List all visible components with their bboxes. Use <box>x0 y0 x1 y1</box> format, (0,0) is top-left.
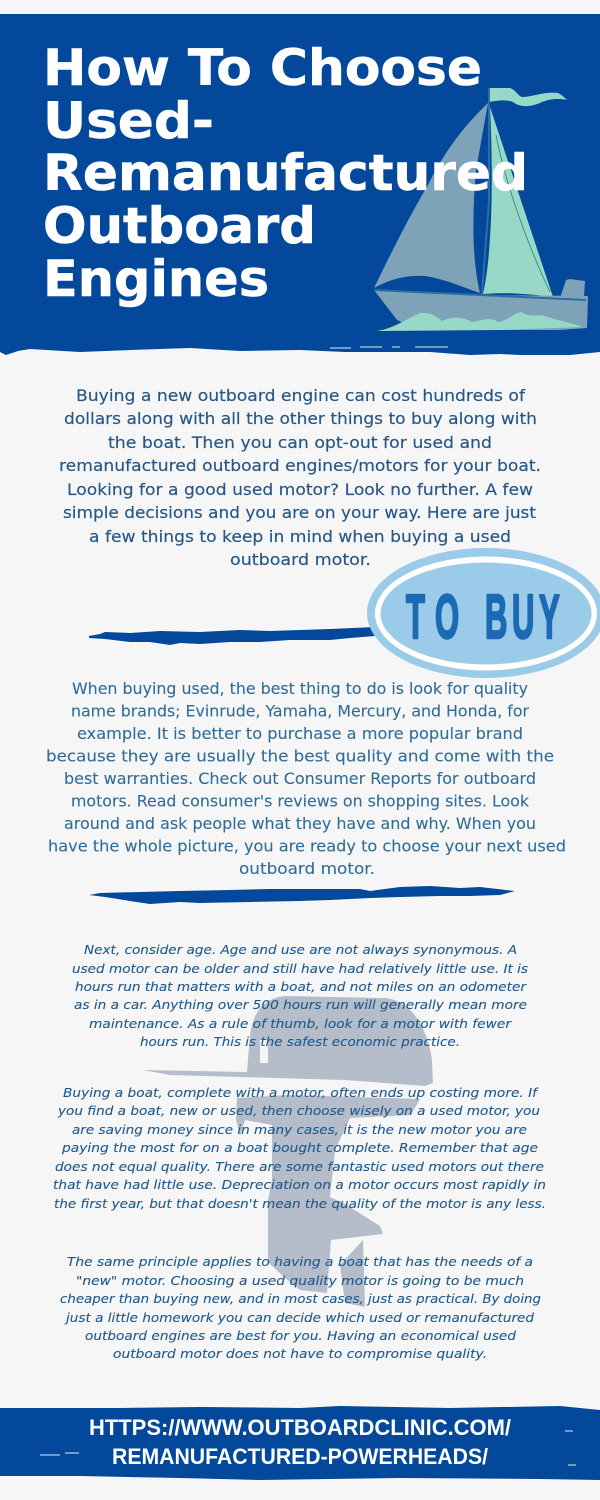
badge: to buy: Y <box>539 584 560 652</box>
paragraph: boat with motor: you find a boat, new or used, then choose wisely on a used motor, you <box>57 1104 540 1119</box>
paragraph: buying used brands <box>46 679 566 878</box>
intro paragraph: Buying a new outboard engine can cost hundreds of <box>76 386 526 405</box>
panel: header band <box>0 14 600 355</box>
footer url: HTTPS://WWW.OUTBOARDCLINIC.COM/ <box>89 1415 511 1440</box>
intro paragraph: the boat. Then you can opt-out for used and <box>108 433 492 452</box>
paragraph: buying used brands: example. It is better to purchase a more popular brand <box>77 724 523 743</box>
paragraph: boat with motor <box>53 1086 546 1212</box>
intro paragraph: simple decisions and you are on your way. Here are just <box>63 503 536 522</box>
intro paragraph: remanufactured outboard engines/motors for your boat. <box>59 456 541 475</box>
intro paragraph: Looking for a good used motor? Look no further. A few <box>67 480 533 499</box>
paragraph: same principle: outboard engines are best for you. Having an economical used <box>85 1329 517 1344</box>
paragraph: buying used brands: name brands; Evinrude, Yamaha, Mercury, and Honda, for <box>71 702 529 720</box>
badge: to buy: B <box>485 584 507 652</box>
paragraph: same principle <box>60 1255 541 1362</box>
left sail <box>374 103 488 293</box>
watermark: outboard motor silhouette <box>143 996 433 1307</box>
paragraph: same principle: The same principle applies to having a boat that has the needs of a <box>67 1255 533 1270</box>
badge: to buy: O <box>435 584 459 652</box>
paragraph: buying used brands: When buying used, the best thing to do is look for quality <box>72 679 528 698</box>
title: Remanufactured <box>43 144 528 202</box>
paragraph: boat with motor: are saving money since in many cases, it is the new motor you are <box>72 1123 527 1138</box>
boat flag <box>489 88 567 106</box>
paragraph: consider age <box>72 943 528 1050</box>
badge: to buy: T <box>406 584 425 652</box>
waves <box>377 312 582 331</box>
title <box>43 39 528 308</box>
title: Used- <box>43 92 214 150</box>
paragraph: consider age: Next, consider age. Age and use are not always synonymous. A <box>84 943 517 958</box>
intro paragraph: dollars along with all the other things to buy along with <box>64 409 537 428</box>
paragraph: consider age: maintenance. As a rule of thumb, look for a motor with fewer <box>89 1017 512 1032</box>
paragraph: boat with motor: paying the most for on a boat bought complete. Remember that age <box>61 1141 538 1156</box>
icon: sailboat <box>374 88 588 331</box>
paragraph: same principle: "new" motor. Choosing a used quality motor is going to be much <box>76 1274 524 1289</box>
paragraph: consider age: hours run that matters with a boat, and not miles on an odometer <box>75 980 527 995</box>
intro paragraph: outboard motor. <box>230 550 371 569</box>
paragraph: same principle: cheaper than buying new, and in most cases, just as practical. By doing <box>60 1292 541 1307</box>
right sail <box>483 107 553 297</box>
jib rope <box>496 135 550 292</box>
paragraph: consider age: as in a car. Anything over 500 hours run will generally mean more <box>74 998 527 1013</box>
paragraph: boat with motor: does not equal quality. There are some fantastic used motors out there <box>55 1160 544 1175</box>
title: How To Choose <box>43 39 482 97</box>
paragraph: boat with motor: the first year, but that doesn't mean the quality of the motor is any less. <box>54 1197 546 1212</box>
paragraph: consider age: hours run. This is the safest economic practice. <box>140 1035 460 1050</box>
paragraph: buying used brands: have the whole picture, you are ready to choose your next used <box>48 836 566 856</box>
title: Engines <box>43 250 269 308</box>
paragraph: buying used brands: because they are usually the best quality and come with the <box>46 746 554 766</box>
paragraph: boat with motor: that have had little use. Depreciation on a motor occurs most rapidly in <box>53 1178 546 1193</box>
title: Outboard <box>43 197 316 255</box>
intro paragraph <box>59 386 541 569</box>
panel: footer url band <box>0 1406 600 1480</box>
footer url: REMANUFACTURED-POWERHEADS/ <box>112 1444 488 1469</box>
footer url <box>89 1415 511 1469</box>
paragraph: consider age: used motor can be older and still have had relatively little use. It is <box>72 962 528 977</box>
boat motor <box>560 279 585 298</box>
mast <box>482 88 489 294</box>
paragraph: buying used brands: around and ask people what they have and why. When you <box>64 814 536 833</box>
paragraph: same principle: outboard motor does not have to compromise quality. <box>113 1347 487 1362</box>
paragraph: buying used brands: outboard motor. <box>239 859 375 878</box>
divider brush stroke 1 <box>89 627 375 645</box>
paragraph: buying used brands: best warranties. Check out Consumer Reports for outboard <box>64 769 536 788</box>
divider brush stroke 2 <box>89 886 515 904</box>
badge: to buy <box>367 548 600 678</box>
badge: to buy: U <box>512 584 534 652</box>
intro paragraph: a few things to keep in mind when buying a used <box>89 527 511 546</box>
paragraph: boat with motor: Buying a boat, complete with a motor, often ends up costing more. If <box>63 1086 540 1101</box>
paragraph: same principle: just a little homework you can decide which used or remanufactured <box>64 1311 535 1326</box>
hull <box>374 290 588 330</box>
paragraph: buying used brands: motors. Read consumer's reviews on shopping sites. Look <box>71 792 530 810</box>
